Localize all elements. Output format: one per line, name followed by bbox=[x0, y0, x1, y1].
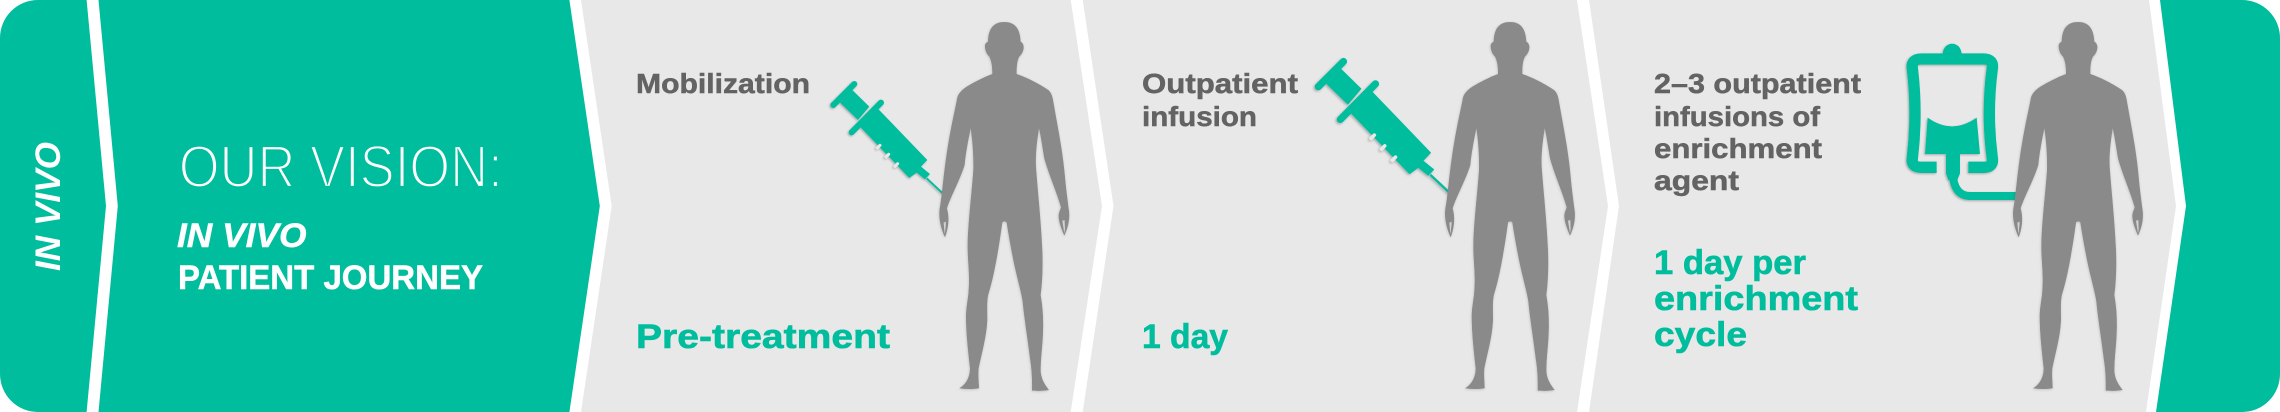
step label: 2-3 outpatient infusions of enrichment agent: 2–3 outpatient bbox=[1654, 68, 1861, 99]
panel: pre-treatment mobilization bbox=[581, 0, 1102, 412]
panel: enrichment infusions bbox=[1589, 0, 2176, 412]
duration: 1 day per enrichment cycle: enrichment bbox=[1654, 280, 1858, 318]
step label: 2-3 outpatient infusions of enrichment agent: infusions of bbox=[1654, 101, 1821, 132]
duration: Pre-treatment: Pre-treatment bbox=[636, 318, 890, 356]
duration: 1 day per enrichment cycle: 1 day per bbox=[1654, 244, 1806, 282]
duration: 1 day: 1 day bbox=[1142, 318, 1228, 356]
duration: 1 day per enrichment cycle bbox=[1654, 244, 1858, 354]
vertical label: IN VIVO: IN VIVO bbox=[29, 142, 68, 271]
icon: human figure bbox=[2013, 22, 2143, 391]
step label: 2-3 outpatient infusions of enrichment agent: enrichment bbox=[1654, 133, 1822, 164]
icon: IV bag with tube bbox=[1912, 44, 2017, 196]
step label: Outpatient infusion: infusion bbox=[1142, 101, 1257, 132]
panel: outpatient infusion bbox=[1083, 0, 1608, 412]
panel: our vision heading bbox=[98, 0, 600, 412]
duration: 1 day per enrichment cycle: cycle bbox=[1654, 316, 1747, 354]
panel: end cap bbox=[2156, 0, 2280, 412]
subheading: PATIENT JOURNEY: PATIENT JOURNEY bbox=[178, 259, 483, 297]
icon: large syringe bbox=[1318, 62, 1450, 193]
step label: 2-3 outpatient infusions of enrichment agent bbox=[1654, 68, 1861, 196]
step label: 2-3 outpatient infusions of enrichment agent: agent bbox=[1654, 165, 1739, 196]
subheading: IN VIVO: IN VIVO bbox=[177, 217, 306, 255]
icon: syringe bbox=[833, 84, 943, 193]
panel: in vivo tab bbox=[0, 0, 106, 412]
heading: OUR VISION: OUR VISION: bbox=[179, 133, 503, 200]
icon: human figure bbox=[939, 22, 1069, 391]
step label: Mobilization: Mobilization bbox=[636, 68, 810, 99]
step label: Outpatient infusion: Outpatient bbox=[1142, 68, 1298, 99]
icon: human figure bbox=[1445, 22, 1575, 391]
step label: Outpatient infusion bbox=[1142, 68, 1298, 132]
